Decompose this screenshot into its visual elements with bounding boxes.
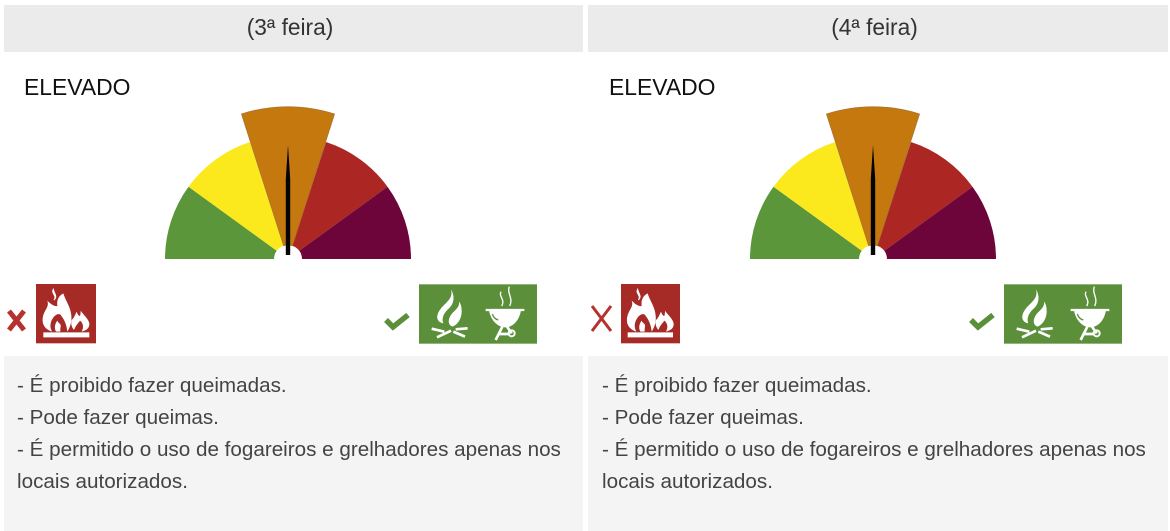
campfire (1022, 289, 1047, 327)
panel: rules, day two: - Pode fazer queimas. (602, 406, 804, 429)
panel: rules, day one (4, 356, 583, 531)
panel header: 4a feira: (4ª feira) (831, 14, 918, 40)
danger level label: day one: ELEVADO (24, 74, 130, 100)
panel: rules, day two: locais autorizados. (602, 470, 773, 493)
grill (1071, 287, 1109, 340)
grill (486, 287, 524, 340)
gauge: day two (750, 107, 996, 259)
icon: fire prohibited, day two (621, 284, 680, 343)
panel: rules, day one: - É permitido o uso de fogareiros e grelhadores apenas nos (17, 438, 561, 461)
icon: fire prohibited, day one (36, 284, 96, 343)
icon: thin cross, day two (592, 306, 611, 331)
panel: rules, day two (588, 356, 1168, 531)
panel: rules, day two: - É proibido fazer queimadas. (602, 374, 872, 397)
icon: campfire and grill allowed, day two (1004, 284, 1122, 344)
icon: campfire and grill allowed, day one (419, 284, 537, 344)
panel header: 4a feira (588, 5, 1168, 52)
panel header: 3a feira (4, 5, 583, 52)
panel: rules, day two: - É permitido o uso de fogareiros e grelhadores apenas nos (602, 438, 1146, 461)
panel header: 3a feira: (3ª feira) (247, 14, 333, 40)
panel: rules, day one: locais autorizados. (17, 470, 188, 493)
icon: check mark, day two (971, 315, 993, 327)
icon: check mark, day one (386, 315, 408, 327)
panel: rules, day one: - Pode fazer queimas. (17, 406, 219, 429)
icon: bold cross, day one (9, 311, 24, 330)
graphics layer (7, 106, 1122, 344)
danger level label: day two: ELEVADO (609, 74, 715, 100)
campfire (437, 289, 462, 327)
gauge: day one (165, 107, 411, 259)
panel: rules, day one: - É proibido fazer queimadas. (17, 374, 287, 397)
